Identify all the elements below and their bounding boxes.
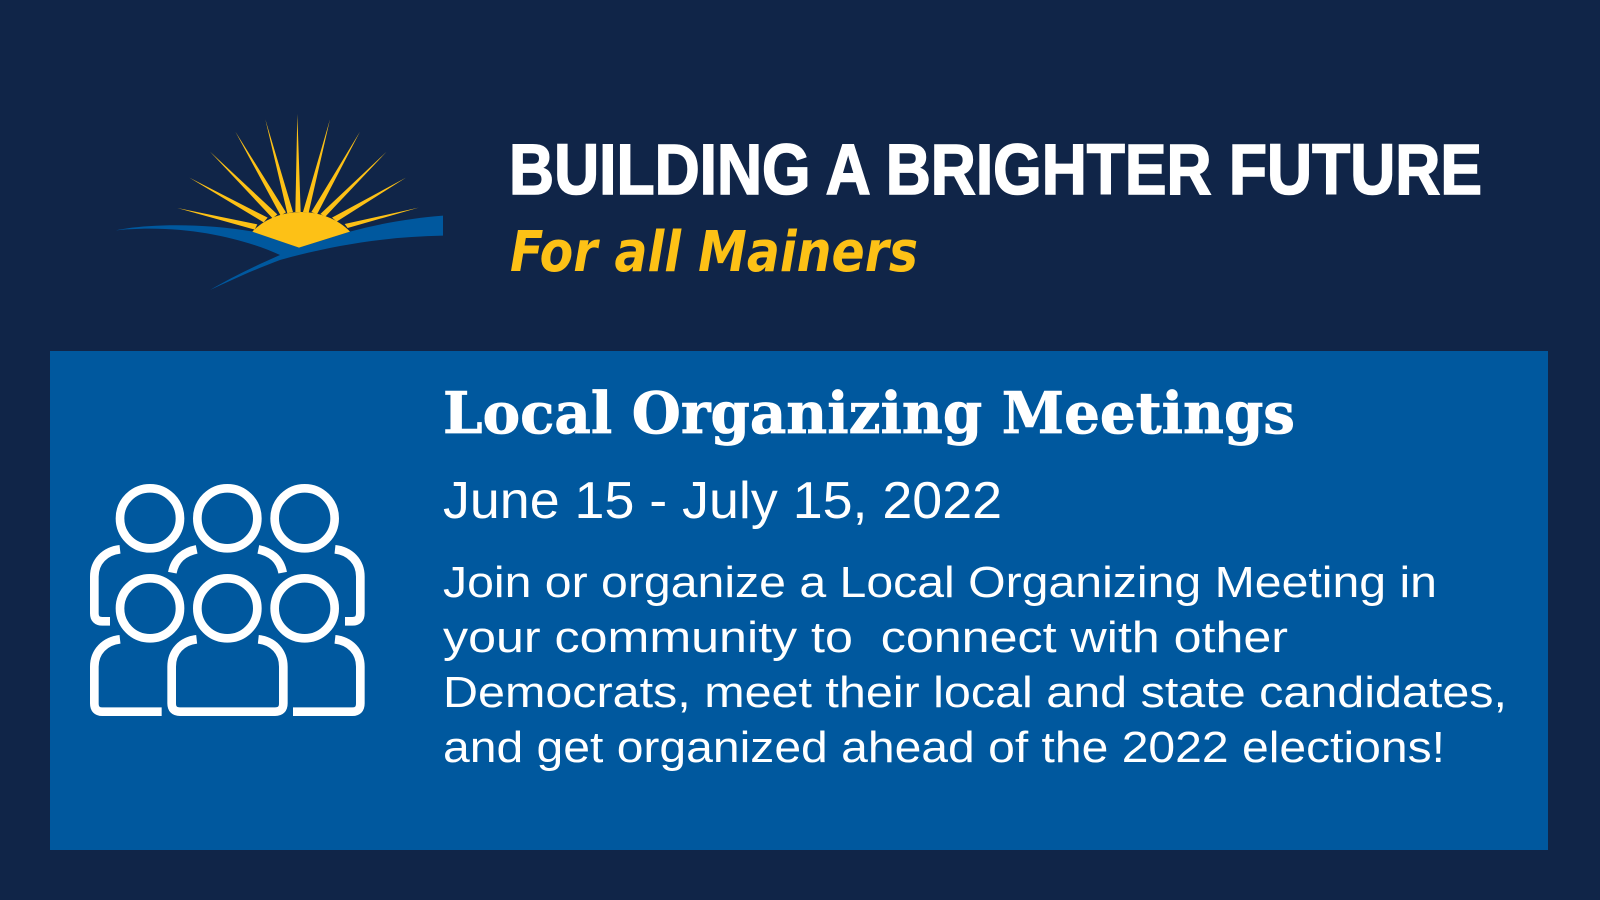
icon: group of people	[94, 488, 360, 712]
panel: meeting details	[50, 351, 1548, 850]
blue swoosh	[116, 216, 443, 290]
sun disc	[252, 212, 350, 248]
body text	[443, 558, 1507, 772]
body text: Join or organize a Local Organizing Meeting in	[443, 558, 1437, 607]
logo: rising sun over blue swoosh	[116, 114, 443, 290]
subtitle: For all Mainers	[510, 220, 918, 285]
sun rays	[177, 114, 419, 230]
date range: June 15 - July 15, 2022	[443, 472, 1002, 530]
title: BUILDING A BRIGHTER FUTURE	[509, 131, 1482, 210]
body text: and get organized ahead of the 2022 elections!	[443, 723, 1445, 772]
body text: your community to connect with other	[443, 613, 1288, 662]
panel heading: Local Organizing Meetings	[443, 380, 1295, 447]
body text: Democrats, meet their local and state candidates,	[443, 668, 1507, 717]
